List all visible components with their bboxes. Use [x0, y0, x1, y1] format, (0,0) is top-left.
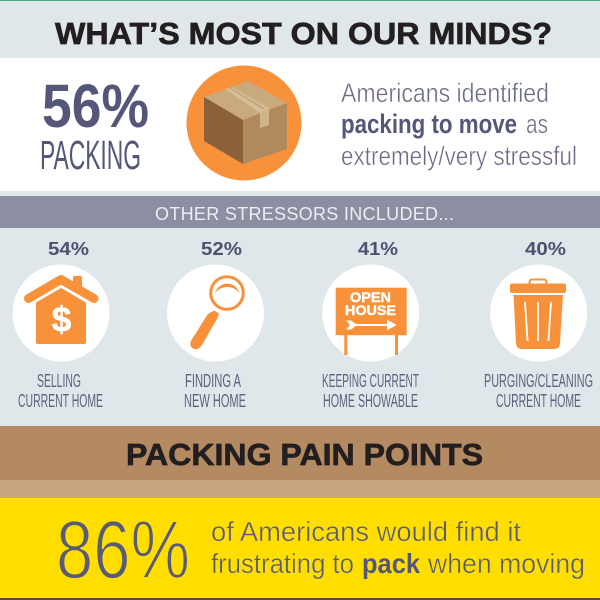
icon: cardboard box — [186, 66, 302, 180]
icon: open house sign: OPEN — [350, 290, 391, 305]
panel: other stressors — [0, 228, 600, 426]
description text: when moving — [427, 548, 585, 579]
stressor: selling current home: CURRENT HOME — [18, 391, 103, 411]
description text: packing to move — [341, 109, 517, 139]
stressor: finding a new home: NEW HOME — [184, 391, 246, 411]
subheading band — [0, 196, 600, 228]
stressor: purging/cleaning current home — [484, 238, 593, 411]
stat: 56%: 56% — [42, 72, 149, 140]
stressor: selling current home — [12, 238, 110, 411]
stressor: selling current home: SELLING — [37, 371, 81, 391]
section heading band — [0, 426, 600, 498]
stressor: keeping current home showable — [322, 238, 419, 411]
icon: open house sign: HOUSE — [345, 303, 396, 318]
description text: Americans identified — [341, 78, 549, 108]
description text — [211, 516, 585, 579]
subheading band: OTHER STRESSORS INCLUDED... — [155, 204, 454, 224]
description text: of Americans would find it — [211, 516, 521, 547]
stressor: finding a new home — [167, 238, 264, 411]
header band — [0, 1, 600, 58]
icon: trash can — [510, 280, 566, 349]
description text: as — [526, 109, 548, 139]
panel: 86% statistic — [0, 498, 600, 598]
stressor: selling current home: 54% — [48, 238, 89, 259]
stressor: purging/cleaning current home: 40% — [525, 238, 566, 259]
stressor: keeping current home showable: KEEPING CURRENT — [322, 371, 419, 391]
description text: frustrating to — [211, 548, 354, 579]
title: WHAT’S MOST ON OUR MINDS? — [55, 16, 552, 51]
stressor: keeping current home showable: 41% — [358, 238, 398, 259]
icon: magnifying glass — [190, 277, 243, 349]
section heading band: PACKING PAIN POINTS — [126, 437, 483, 472]
description text: pack — [362, 548, 420, 579]
stat label: packing: PACKING — [40, 132, 141, 178]
icon: open house sign — [336, 288, 407, 355]
description text — [341, 78, 577, 171]
stressor: finding a new home: 52% — [201, 238, 242, 259]
stat: 86%: 86% — [56, 503, 190, 596]
stressor: finding a new home: FINDING A — [185, 371, 241, 391]
icon: house with dollar sign: $ — [52, 300, 71, 340]
icon: house with dollar sign — [28, 276, 94, 344]
stressor: keeping current home showable: HOME SHOWABLE — [323, 391, 418, 411]
panel: packing statistic — [0, 58, 600, 191]
